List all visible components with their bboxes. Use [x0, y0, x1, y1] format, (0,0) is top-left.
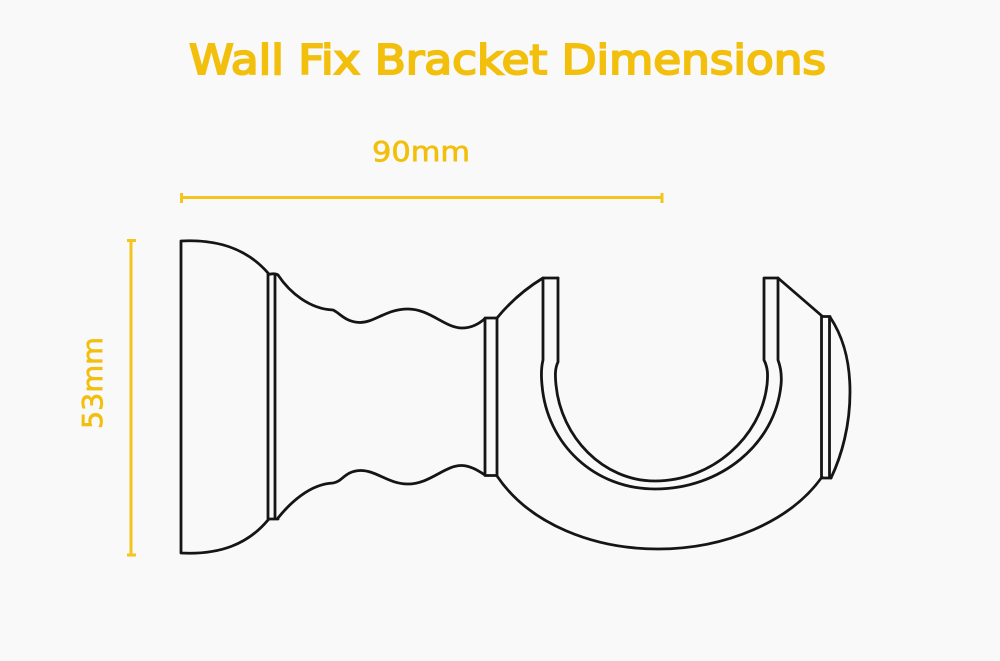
first collar: [268, 273, 278, 520]
bracket stem: [278, 275, 485, 518]
hook outer body: [497, 278, 822, 549]
end cap: [830, 317, 850, 478]
height dimension line: [127, 240, 136, 555]
hook outer groove: [541, 278, 781, 489]
end collar: [822, 316, 831, 478]
bracket line drawing: [181, 241, 850, 553]
wall plate: [181, 241, 268, 553]
width label: 90mm: 90mm: [372, 136, 470, 168]
hook inner groove: [555, 278, 822, 481]
second collar: [485, 318, 497, 476]
height label: 53mm: 53mm: [77, 337, 109, 429]
width dimension line: [181, 193, 663, 203]
title: Wall Fix Bracket Dimensions: [189, 36, 826, 84]
